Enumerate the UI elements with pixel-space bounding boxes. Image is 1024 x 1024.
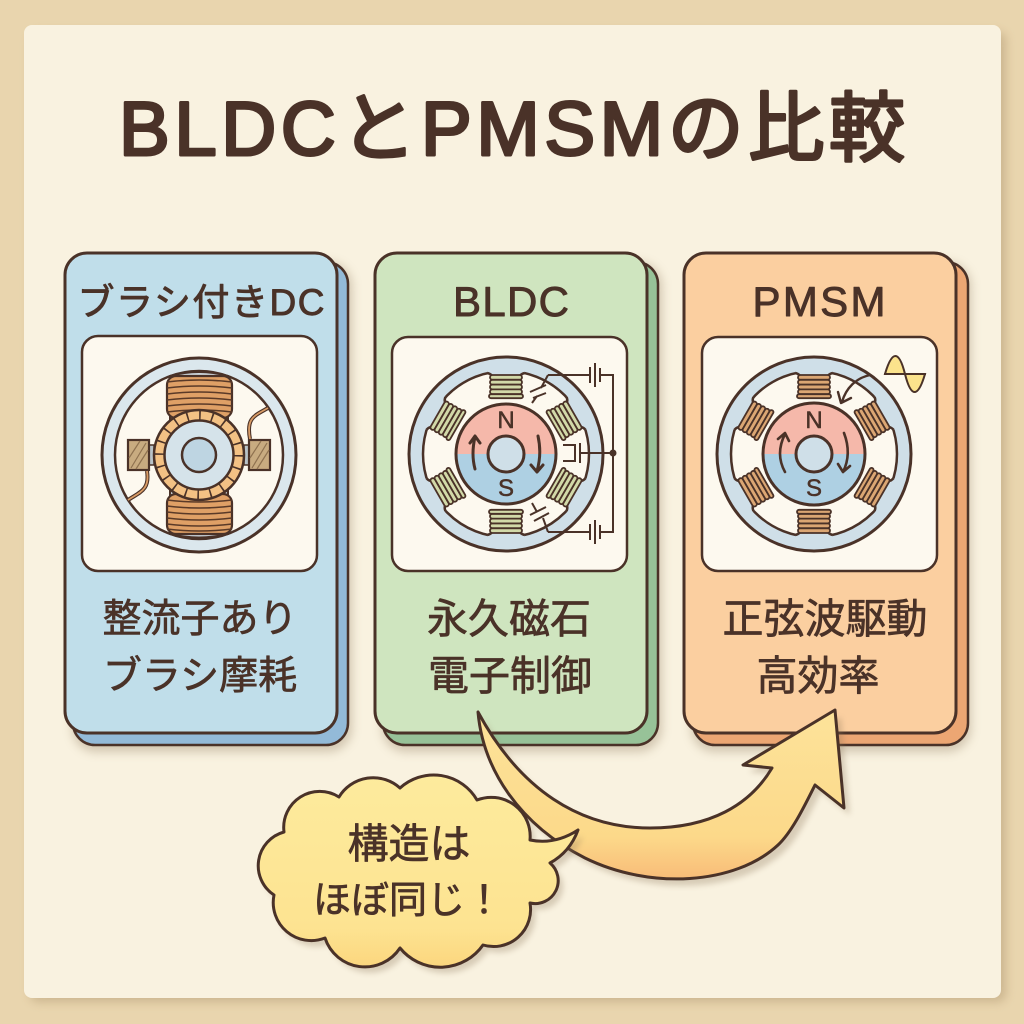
panel: BLDC (375, 253, 662, 752)
heading: PMSM: PMSM (752, 278, 886, 325)
heading: BLDC: BLDC (453, 278, 569, 325)
top field coil (167, 372, 232, 420)
bottom field coil (167, 490, 232, 538)
text: permanent magnet, electronic control: 永久磁石 (427, 596, 591, 642)
text: commutator, brush wear: 整流子あり (102, 598, 298, 641)
callout: structure nearly identical (258, 775, 583, 973)
panel: brushed DC (65, 253, 352, 752)
diagram: BLDC motor (392, 337, 627, 571)
rotor: S (498, 475, 514, 502)
callout text (313, 821, 503, 922)
rotor: N (497, 407, 515, 434)
card front (375, 253, 647, 733)
text: commutator, brush wear: ブラシ摩耗 (103, 655, 297, 698)
card back layer (383, 262, 658, 745)
wires (128, 408, 268, 500)
text: permanent magnet, electronic control (427, 596, 592, 699)
rotor (763, 403, 865, 505)
arrow: sine to stator (838, 375, 870, 403)
drive circuit (530, 363, 616, 544)
diagram: PMSM motor (702, 337, 937, 571)
rotor: S (806, 475, 822, 502)
text: sine drive, high efficiency: 正弦波駆動 (722, 596, 928, 642)
text: sine drive, high efficiency: 高効率 (756, 653, 880, 699)
callout text: 構造は (348, 821, 470, 867)
card front (65, 253, 337, 733)
text: commutator, brush wear (102, 598, 298, 698)
card back layer (73, 262, 348, 745)
card back layer (693, 262, 968, 745)
icon: sine wave (884, 356, 926, 392)
callout text: ほぼ同じ！ (313, 880, 503, 922)
rotor (456, 404, 556, 504)
text: sine drive, high efficiency (722, 596, 928, 699)
left brush (128, 440, 154, 470)
diagram: brushed DC motor (82, 336, 317, 571)
right brush (244, 440, 270, 470)
heading: brushed DC: ブラシ付きDC (78, 282, 324, 323)
rotor: N (805, 407, 823, 434)
arrow: BLDC to PMSM (478, 710, 850, 886)
title: BLDCとPMSMの比較 (119, 87, 905, 172)
text: permanent magnet, electronic control: 電子制御 (428, 653, 592, 699)
panel: PMSM (684, 253, 971, 752)
card front (684, 253, 956, 733)
commutator and rotor (154, 410, 244, 500)
